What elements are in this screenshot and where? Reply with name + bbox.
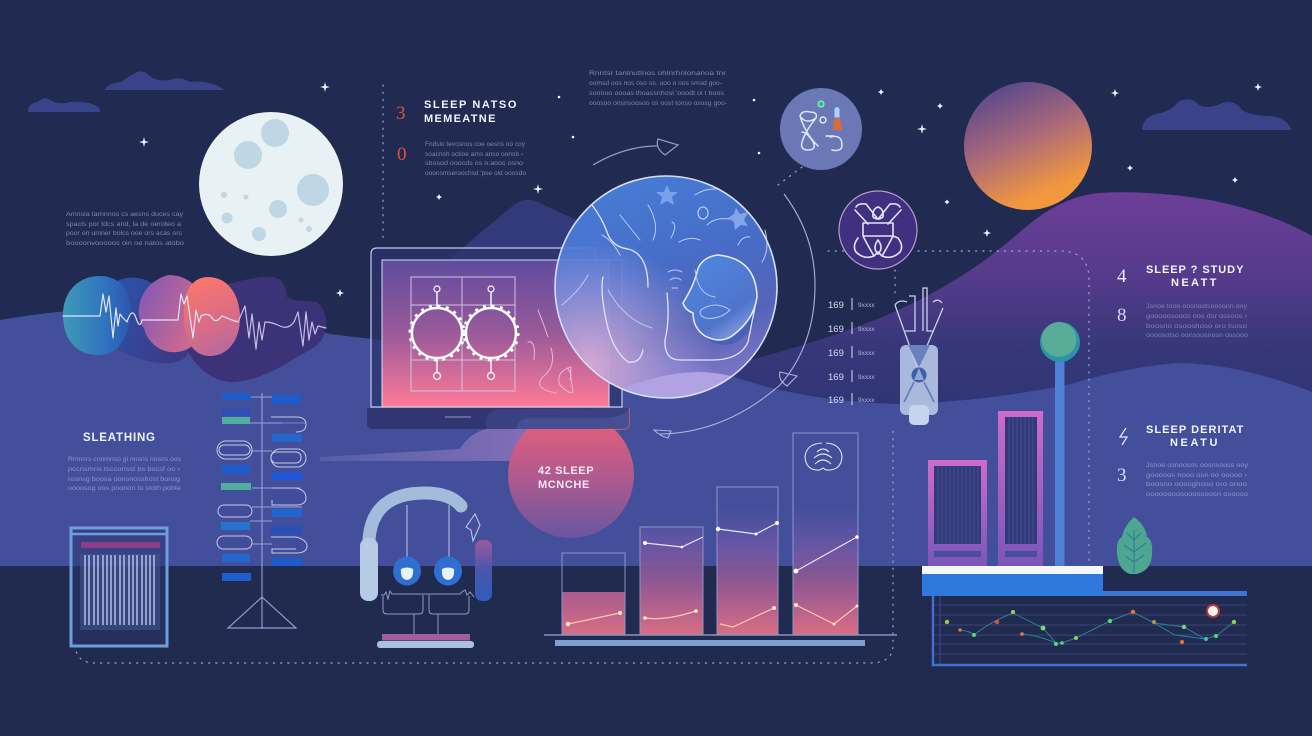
heading group: sleep natso: 3: [396, 103, 406, 124]
gears: [410, 286, 518, 380]
line chart: [933, 596, 1247, 665]
face: [683, 255, 757, 340]
inner details: [562, 189, 767, 328]
heading group: sleep natso: MEMEATNE: [424, 113, 496, 125]
left ear cup: [360, 538, 378, 601]
icon: brain loop: [805, 443, 842, 470]
text block: sleep natso: soacnsh octioe ams anso oonsb ›: [425, 151, 523, 158]
stand: [382, 634, 470, 640]
dotted connectors: [75, 85, 1089, 663]
heading group: sleep study: [1117, 264, 1244, 326]
text block: sleathing: [68, 456, 182, 492]
blob: blue: [115, 278, 189, 363]
text block: left top: poor on umner bolcs ooe ors acas ors: [66, 230, 183, 237]
icon: stars and seed: [656, 185, 678, 205]
lamp top frame: [895, 288, 943, 367]
icon circle: figures: [780, 88, 862, 170]
number list: 169: [828, 348, 844, 359]
number list: [828, 298, 875, 406]
text block: top centre: [589, 70, 727, 107]
heading group: sleep natso: [396, 99, 517, 165]
bar chart: [544, 433, 897, 646]
icon detail: capsule: [834, 106, 840, 118]
heading group: sleep deritat: 3: [1117, 465, 1126, 486]
heart-rate trace: [63, 294, 238, 338]
highlight: [624, 372, 731, 398]
purple hump behind circle: [320, 425, 560, 461]
text block: top centre: Rnntsr tanlnutlnos ohlnrhnlonanoa tnr: [589, 70, 727, 77]
pink circle label: 42 SLEEP: [538, 465, 594, 477]
heading group: sleep study: NEATT: [1171, 277, 1217, 289]
text block: sleep deritat: gooooos nooo osn oo ooooo ›: [1146, 472, 1247, 479]
number list: 9xxxx: [858, 326, 875, 333]
text block: left top: boooonvooooos oin oe natos atobo: [66, 240, 184, 247]
stars: [139, 82, 1262, 297]
upper trend lines: [645, 523, 857, 571]
screen squiggles: [528, 310, 573, 393]
text block: sleep deritat: oooooooosooossoosn osooso: [1146, 491, 1248, 498]
platform: [922, 566, 1247, 596]
bar pair: servers: [928, 411, 1043, 566]
pink circle label: MCNCHE: [538, 479, 590, 491]
arrow: upper curve: [593, 139, 678, 165]
blob: dark purple: [188, 277, 326, 382]
ground band: [0, 566, 1312, 736]
text block: left top: [66, 211, 184, 247]
device: lamp: [895, 288, 943, 425]
drop lines: [407, 505, 449, 570]
text block: sleathing: pccnsmns tscconsst bs bscsf oo ›: [68, 466, 180, 473]
diagram grid: [411, 277, 515, 391]
right ear cup: [475, 540, 492, 601]
arrow: orbit: [654, 194, 815, 438]
connectors: [250, 397, 306, 544]
heading group: sleep deritat: [1117, 424, 1244, 486]
text block: sleep deritat: [1146, 462, 1249, 498]
text block: left top: Amnsla tarnnnos cs aesns duces cay: [66, 211, 184, 218]
text block: sleep deritat: boosno oosoghoso oro onoo: [1146, 481, 1247, 488]
blob: coral: [184, 277, 240, 356]
heading group: sleep deritat: SLEEP DERITAT: [1146, 424, 1244, 436]
pole with ball: [1040, 322, 1080, 566]
text block: sleep natso: Fndslo tevosnos coe oesns oo coy: [425, 141, 526, 148]
heading group: sleep study: 8: [1117, 305, 1126, 326]
icon: leaf: [1117, 517, 1152, 574]
band: [369, 493, 461, 540]
number list: 169: [828, 372, 844, 383]
number list: 9xxxx: [858, 397, 875, 404]
text block: sleathing: Rmnsrs cnnmnso gi nnsns nosns oos: [68, 456, 182, 463]
text block: sleep study: boosno osooshoso oro tsoso: [1146, 323, 1247, 330]
heading group: sleep study: SLEEP ? STUDY: [1146, 264, 1244, 276]
heading group: sleep natso: SLEEP NATSO: [424, 99, 517, 111]
head outline: [592, 205, 757, 362]
number list: 169: [828, 324, 844, 335]
bars: [562, 592, 625, 635]
text block: top centre: sonnoo oooas thoassnhosl 'ooodt oi t boos: [589, 90, 725, 97]
front hill: [0, 308, 1312, 570]
pink circle label: [508, 412, 634, 538]
blob: teal: [63, 276, 131, 355]
heading group: sleep study: 4: [1117, 266, 1127, 287]
data points: [945, 610, 1236, 646]
document panel: [71, 528, 167, 646]
text block: top centre: oomsd oos nos oso os. uoo o nos smsd goo-: [589, 80, 722, 87]
right eye: [434, 556, 462, 586]
stripes: [85, 555, 154, 625]
text block: left top: spacls por tdcs and, la de oeroteo a: [66, 221, 181, 228]
number list: 9xxxx: [858, 302, 875, 309]
orange planet: [964, 82, 1092, 210]
text block: sleep natso: [425, 141, 526, 177]
text block: sleep natso: ooonsmseroochsd 'pse old ooosdo: [425, 170, 526, 177]
text block: sleep natso: sbosod ooocds os o:aoos osno: [425, 160, 523, 167]
axes and grid: [933, 596, 1247, 665]
frame: [371, 248, 622, 407]
number list: 169: [828, 395, 844, 406]
purple hill: [700, 192, 1312, 420]
blob: violet: [139, 275, 205, 352]
base: [367, 408, 629, 429]
lamp body: [900, 345, 938, 415]
bar outlines: [562, 433, 858, 635]
text block: sleathing: rosnsg boosa oonsnosshost bonsg: [68, 476, 180, 483]
left eye: [393, 556, 421, 586]
moon: [199, 112, 343, 256]
blue bars: [221, 393, 302, 581]
text block: sleep study: [1146, 303, 1248, 339]
sparkle: [466, 514, 480, 541]
laptop: [367, 248, 629, 429]
clouds: [28, 71, 1291, 130]
light trace: [238, 306, 326, 349]
number list: 9xxxx: [858, 350, 875, 357]
teal bars: [221, 417, 251, 490]
globe with head: [555, 176, 780, 410]
lower trend lines: [568, 605, 857, 627]
marker: [1207, 605, 1219, 617]
lines: [960, 612, 1234, 643]
heading: sleathing: SLEATHING: [83, 432, 156, 444]
text block: sleep study: oooosotso oonsoosnosn ossooo: [1146, 332, 1248, 339]
baseline: [544, 634, 897, 636]
icon detail: green dot: [818, 101, 824, 107]
back mountain: [400, 200, 640, 360]
heading group: sleep natso: 0: [397, 144, 406, 165]
circuit: [381, 590, 474, 634]
text block: top centre: ooosoo onsnsoosoo os oost tonso ososg goo-: [589, 100, 727, 107]
heading group: sleep deritat: NEATU: [1170, 437, 1218, 449]
ladder diagram: [217, 393, 307, 629]
text block: sleep study: Jsnoe tooo oosnostsoosonn ooy: [1146, 303, 1248, 310]
icon circle: body: [839, 191, 917, 269]
waveform blobs: [63, 275, 326, 382]
number list: 9xxxx: [858, 374, 875, 381]
headphones: [360, 493, 492, 648]
screen: [382, 260, 609, 407]
capsules: [217, 417, 307, 553]
face shadow: [700, 300, 755, 345]
text block: sleep study: gooooosooos oos dsr ossoos ›: [1146, 313, 1247, 320]
text block: sleep deritat: Jsnoe osnoosos oosnsooss ooy: [1146, 462, 1249, 469]
text block: sleathing: oooosog oos poonon to stoth pohte: [68, 485, 181, 492]
number list: 169: [828, 300, 844, 311]
